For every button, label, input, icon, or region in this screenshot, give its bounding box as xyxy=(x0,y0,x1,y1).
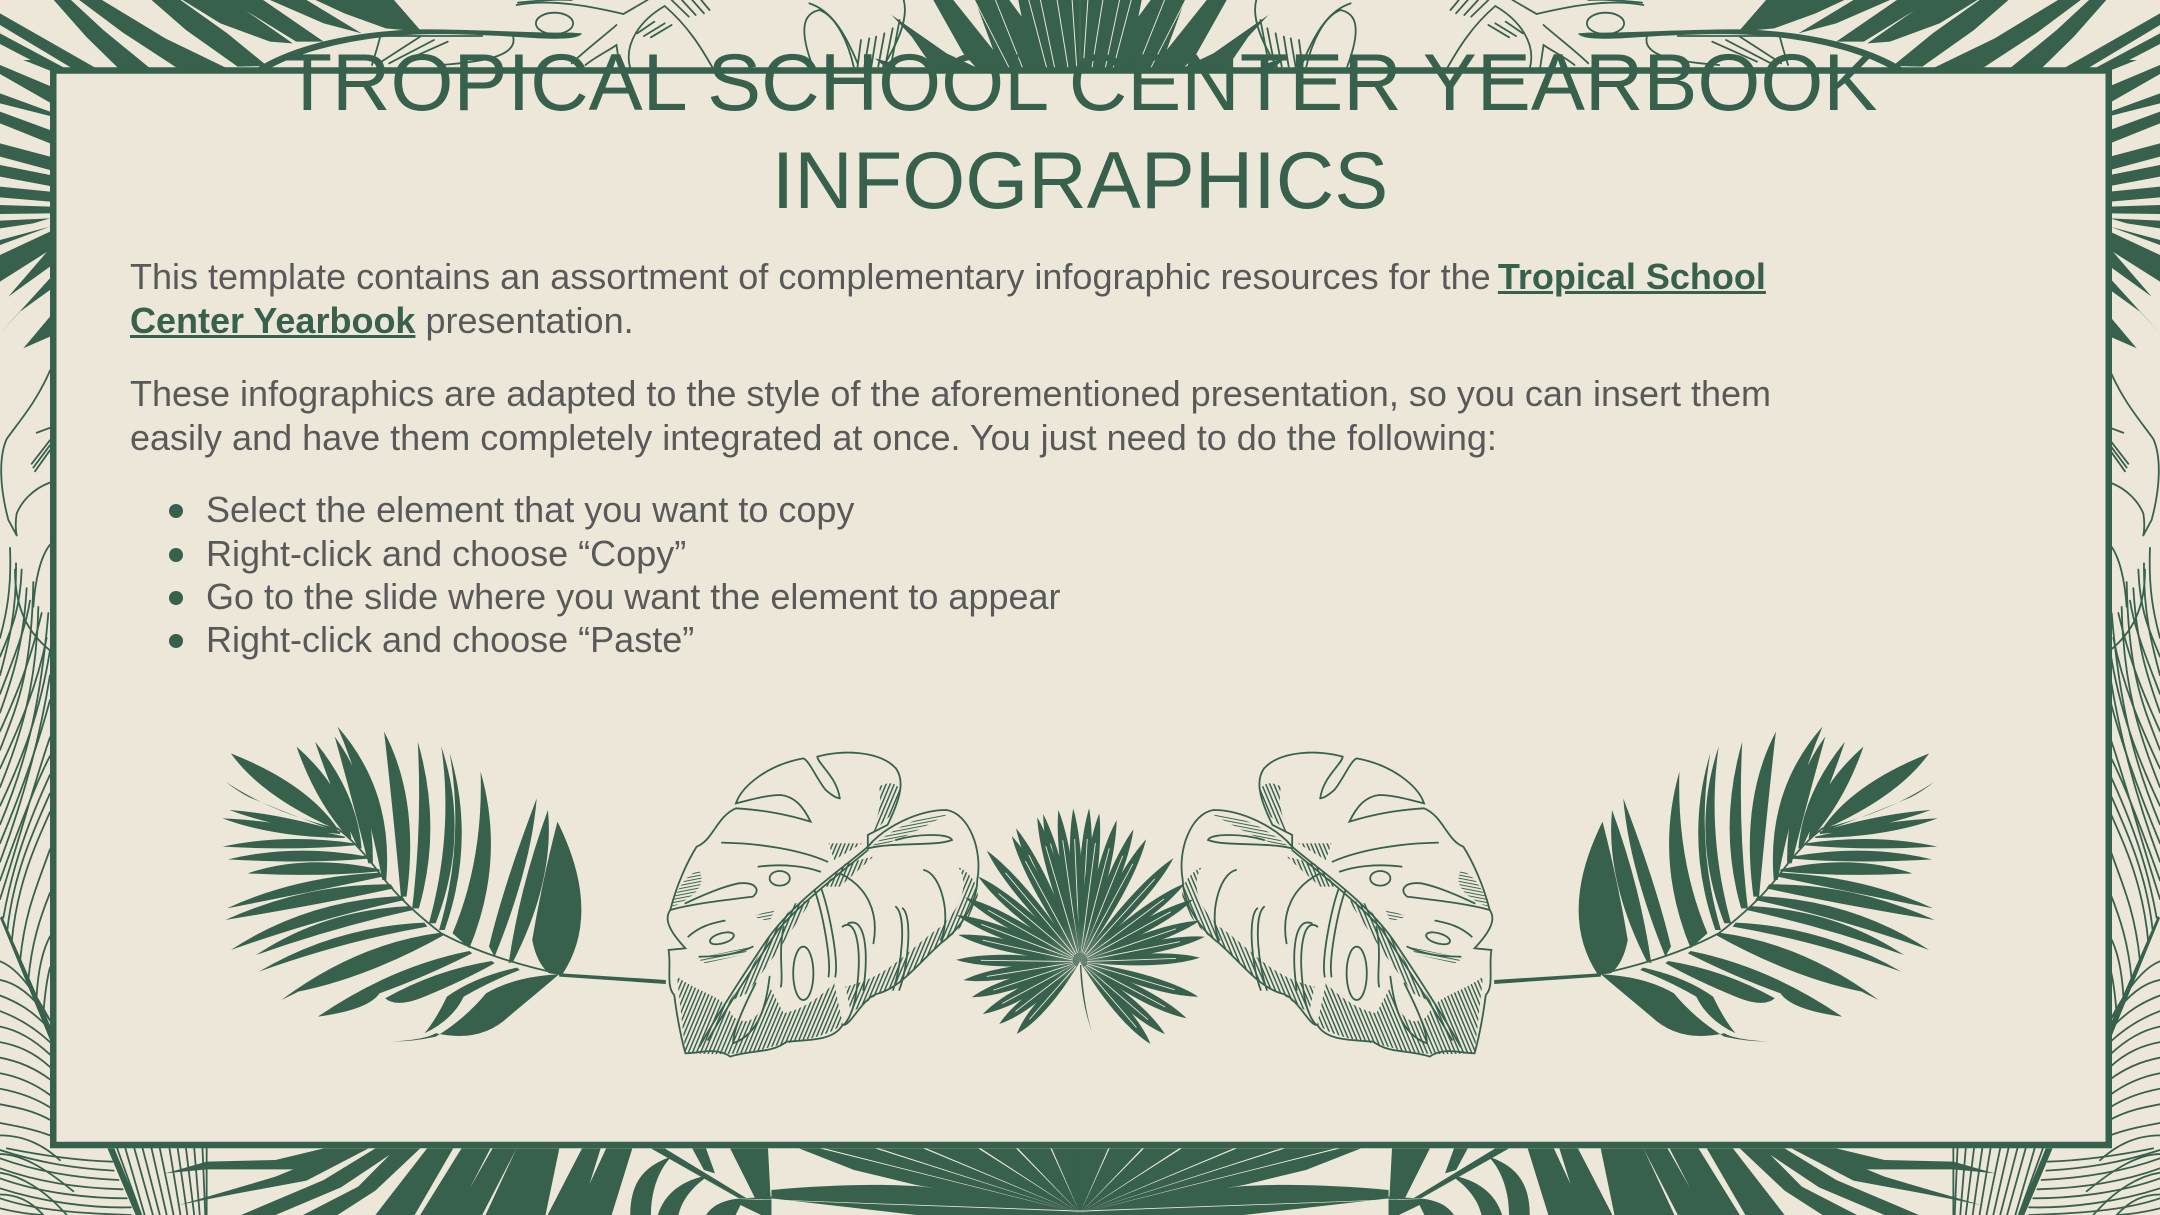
fan palm: bottom centre xyxy=(771,1148,1080,1215)
list item 1: Select the element that you want to copy xyxy=(206,489,854,530)
botanical ornament: left half xyxy=(222,727,978,1057)
palm leaflets: left strip xyxy=(0,60,50,348)
title: INFOGRAPHICS xyxy=(772,136,1388,226)
list item 3: Go to the slide where you want the element to appear xyxy=(206,576,1061,617)
line art: left strip monstera and feather leaf xyxy=(0,371,73,1215)
list item 2: Right-click and choose “Copy” xyxy=(206,533,686,574)
line art: top-left monstera xyxy=(372,0,905,68)
list item 4: Right-click and choose “Paste” xyxy=(206,619,694,660)
icon: palm frond xyxy=(222,727,666,1042)
fan palm: top centre xyxy=(875,0,1080,68)
leaflets xyxy=(165,1148,771,1215)
text block: introduction: Center Yearbook presentation. xyxy=(130,300,634,341)
text block: introduction: This template contains an assortment of complementary infographic resources for the Tropical School xyxy=(130,256,1766,297)
title xyxy=(283,38,1877,226)
text block: introduction xyxy=(130,256,1766,341)
text block: instructions: easily and have them completely integrated at once. You just need to do the following: xyxy=(130,417,1497,458)
icon: fan palm xyxy=(954,808,1206,1048)
text block: instructions xyxy=(130,373,1771,458)
line art: feather leaf lines xyxy=(0,1148,207,1215)
bottom-left foliage strip xyxy=(0,1148,1080,1215)
title: TROPICAL SCHOOL CENTER YEARBOOK xyxy=(283,38,1877,128)
botanical ornament: right half (mirrored) xyxy=(1182,727,1938,1057)
icon: monstera leaf xyxy=(668,753,978,1057)
background foliage: left half xyxy=(0,0,1080,1215)
rachis xyxy=(107,1148,142,1215)
background foliage: right half (mirrored) xyxy=(1080,0,2160,1215)
palm frond: top-left corner xyxy=(0,0,582,68)
text block: instructions: These infographics are adapted to the style of the aforementioned presentation, so you can insert them xyxy=(130,373,1771,414)
bullet list: steps xyxy=(169,489,1061,660)
